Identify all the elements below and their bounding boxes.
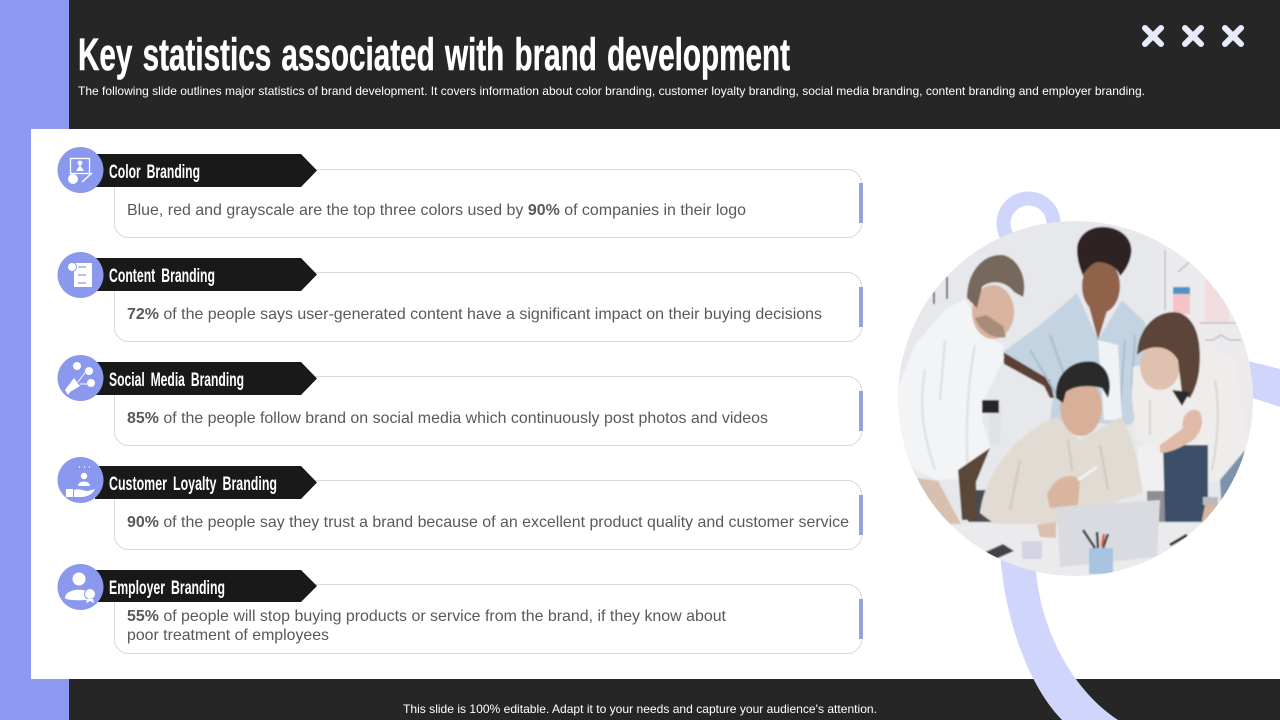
desk bbox=[950, 523, 1201, 529]
card bbox=[114, 170, 862, 238]
stat text: 85% of the people follow brand on social media which continuously post photos and videos bbox=[127, 410, 768, 427]
laptop bbox=[1057, 500, 1160, 567]
row 5: employer branding bbox=[58, 564, 863, 654]
row 1: color branding bbox=[58, 147, 863, 238]
banner label: Customer Loyalty Branding bbox=[109, 474, 277, 495]
icon: three x marks bbox=[1145, 28, 1241, 44]
wall base strips bbox=[967, 489, 992, 523]
banner bbox=[95, 466, 317, 499]
woman at right bbox=[1132, 364, 1242, 481]
man at left bbox=[893, 298, 1004, 480]
pen cup bbox=[1089, 548, 1113, 574]
stat text: 90% of the people say they trust a brand because of an excellent product quality and customer service bbox=[127, 514, 849, 531]
stat text: 72% of the people says user-generated content have a significant impact on their buying decisions bbox=[127, 306, 822, 323]
row 4: customer loyalty branding bbox=[58, 457, 863, 550]
card accent bbox=[859, 495, 863, 535]
stat text second line: poor treatment of employees bbox=[127, 627, 329, 644]
stat text: Blue, red and grayscale are the top three colors used by 90% of companies in their logo bbox=[127, 202, 746, 219]
banner label: Color Branding bbox=[109, 162, 200, 183]
banner bbox=[95, 570, 317, 602]
card accent bbox=[859, 599, 863, 639]
decorative arc bbox=[1000, 360, 1280, 720]
icon: color palette and canvas bbox=[58, 147, 104, 193]
row 3: social media branding bbox=[58, 355, 863, 446]
banner bbox=[95, 362, 317, 395]
card accent bbox=[859, 287, 863, 327]
banner bbox=[95, 154, 317, 187]
card bbox=[114, 480, 862, 550]
stat text: 55% of people will stop buying products or service from the brand, if they know about bbox=[127, 608, 727, 625]
woman at back bbox=[1003, 293, 1150, 425]
card bbox=[114, 376, 862, 446]
phone and papers bbox=[983, 544, 1014, 559]
card accent bbox=[859, 183, 863, 223]
footer band bbox=[69, 679, 1280, 720]
title: Key statistics associated with brand development bbox=[78, 29, 790, 80]
icon: content list bbox=[58, 252, 104, 298]
banner label: Employer Branding bbox=[109, 578, 225, 599]
row 2: content branding bbox=[58, 252, 863, 342]
white content panel bbox=[31, 129, 1280, 679]
photo: team around laptop bbox=[890, 215, 1260, 590]
banner label: Content Branding bbox=[109, 266, 215, 287]
card bbox=[114, 584, 862, 654]
icon: megaphone with social bubbles bbox=[58, 355, 104, 401]
header band bbox=[69, 0, 1280, 129]
left accent strip bbox=[0, 0, 69, 720]
decorative ring bbox=[1004, 198, 1054, 248]
icon: employee with award bbox=[58, 564, 104, 610]
man in front bbox=[980, 417, 1143, 528]
card bbox=[114, 272, 862, 342]
subtitle: The following slide outlines major statistics of brand development. It covers information about color branding, customer loyalty branding, social media branding, content branding and employer branding. bbox=[78, 84, 1145, 98]
card accent bbox=[859, 391, 863, 431]
banner bbox=[95, 258, 317, 291]
footer note: This slide is 100% editable. Adapt it to your needs and capture your audience's attention. bbox=[403, 702, 877, 716]
icon: hand holding customer bbox=[58, 457, 104, 503]
banner label: Social Media Branding bbox=[109, 370, 244, 391]
